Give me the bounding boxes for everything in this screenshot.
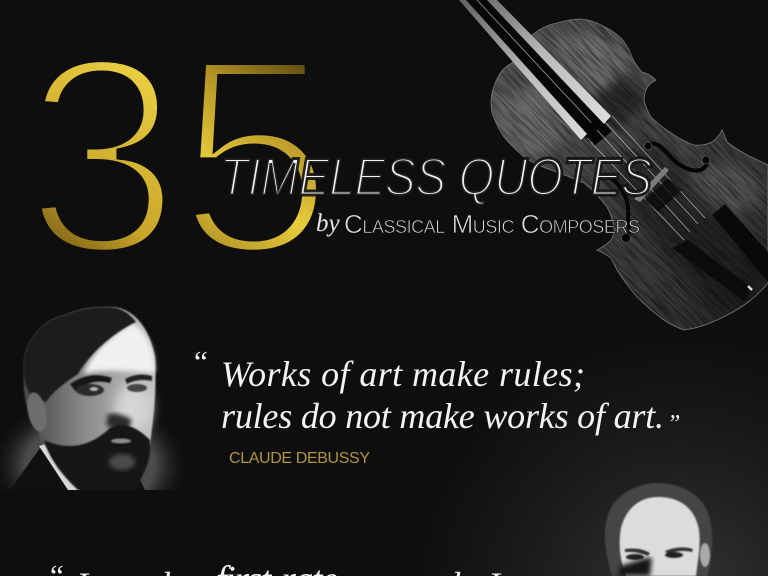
big gold number 35: 5 [177, 0, 334, 313]
ear [26, 392, 46, 432]
quote: Debussy [194, 344, 680, 467]
head [22, 306, 156, 451]
violin body [490, 18, 768, 330]
strings [587, 116, 705, 240]
attribution: CLAUDE DEBUSSY [229, 450, 370, 467]
big gold number 35: 3 [24, 0, 181, 313]
nose shadow [618, 558, 652, 576]
nose shadow [106, 414, 132, 430]
hair [23, 307, 136, 402]
quote: second composer [50, 558, 502, 576]
background glow behind second portrait [400, 320, 768, 576]
portrait glow [3, 422, 177, 490]
by: by [316, 210, 340, 237]
subtitle [316, 209, 640, 239]
title: Timeless Quotes: TIMELESS QUOTES [220, 148, 652, 207]
composers line: Classical Music Composers [344, 209, 640, 239]
quote line 1: Works of art make rules; [221, 354, 585, 394]
eyes and brows [70, 375, 152, 396]
tailpiece and shadows [672, 204, 768, 302]
big gold number 35 [24, 0, 334, 313]
lips and chin [111, 438, 131, 444]
cheek light [115, 384, 151, 432]
shoulders [10, 448, 145, 490]
ear [700, 543, 710, 567]
face [620, 497, 700, 576]
quote line 2: rules do not make works of art. [221, 396, 664, 436]
portrait: Claude Debussy [3, 306, 177, 490]
eyes and brows [625, 547, 693, 560]
fingerboard and neck [459, 0, 612, 146]
beard [44, 425, 150, 490]
collar [39, 444, 80, 490]
icon: violin [459, 0, 768, 330]
opening quotation mark: “ [194, 344, 208, 379]
bridge [634, 167, 669, 202]
portrait: second composer [605, 483, 712, 576]
head [605, 483, 712, 576]
forehead highlight [84, 323, 155, 374]
closing quotation mark: ” [667, 411, 680, 437]
f-holes [611, 142, 710, 242]
